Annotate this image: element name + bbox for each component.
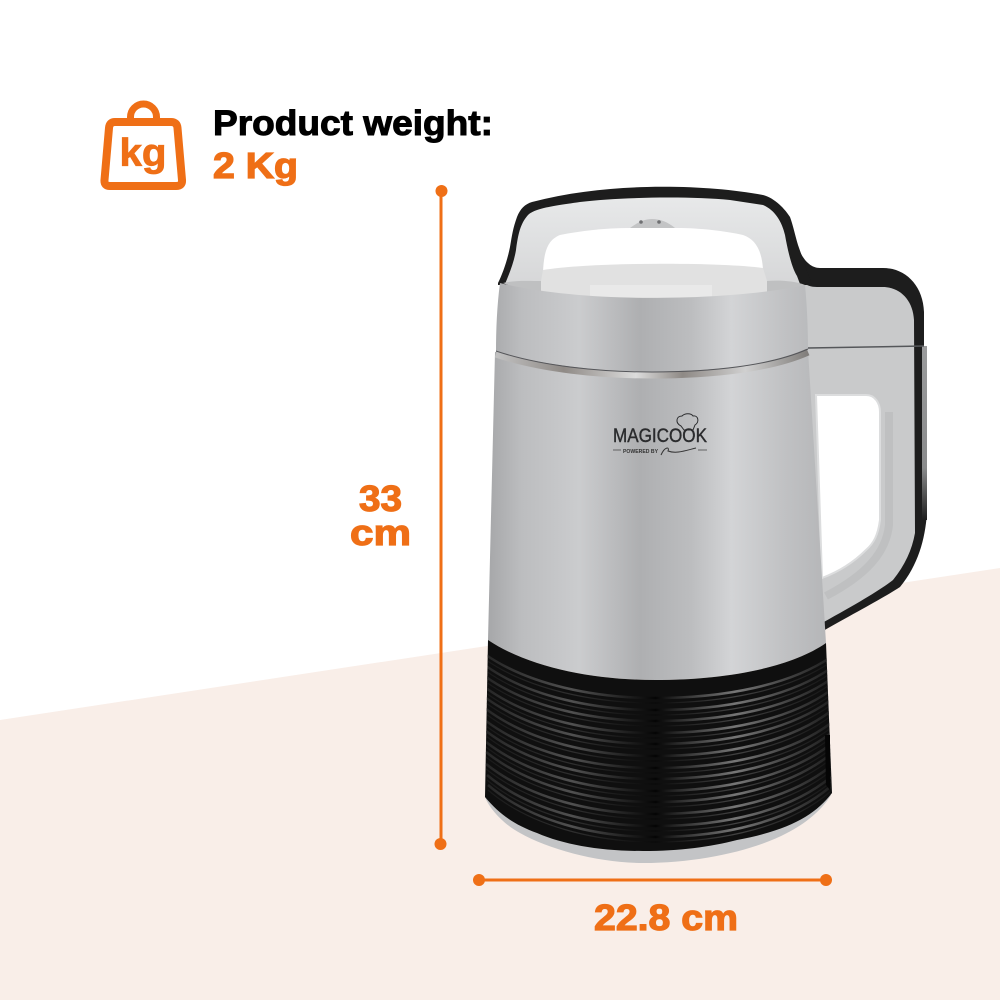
arrow: width dimension line <box>473 874 832 886</box>
height value <box>350 478 411 553</box>
logo: Magicook <box>613 414 707 455</box>
handle inner shading <box>826 412 889 596</box>
handle outer strip highlight <box>922 346 927 520</box>
weight value: 2 Kg <box>213 145 298 186</box>
base grey bottom <box>485 795 831 863</box>
lid rim left <box>503 281 541 293</box>
heading: product weight: Product weight: <box>213 104 493 143</box>
icon: kg weight bag: kg <box>120 132 166 175</box>
icon: kg weight bag <box>104 104 182 186</box>
main body <box>488 350 826 680</box>
logo: Magicook: MAGICOOK <box>613 425 707 447</box>
lid <box>541 264 767 300</box>
black top handle outline <box>498 187 812 285</box>
metal ring <box>496 352 808 375</box>
height value: 33 <box>359 478 402 519</box>
background floor band <box>0 568 1000 1000</box>
side handle grey body <box>797 274 915 623</box>
ring shadow line <box>496 349 808 372</box>
top handle grey <box>505 198 800 284</box>
base rib secondary lines <box>486 660 831 842</box>
lid rim right <box>767 281 805 294</box>
vent holes <box>639 220 661 224</box>
rear switch detail <box>825 735 830 790</box>
side handle black strip <box>795 243 927 631</box>
logo: Magicook: POWERED BY <box>623 449 658 455</box>
product: soy milk maker <box>485 187 927 863</box>
height value: cm <box>350 512 411 553</box>
vent bump <box>630 219 675 228</box>
base ribs <box>486 655 831 837</box>
top handle opening <box>543 228 763 272</box>
chef hat <box>677 414 698 430</box>
arrow: height dimension line <box>434 185 448 850</box>
handle opening <box>816 395 880 578</box>
display label <box>590 285 712 297</box>
lid collar <box>496 283 808 373</box>
width value: 22.8 cm <box>594 897 738 938</box>
handle seam <box>808 346 924 348</box>
black ribbed base <box>485 640 832 851</box>
